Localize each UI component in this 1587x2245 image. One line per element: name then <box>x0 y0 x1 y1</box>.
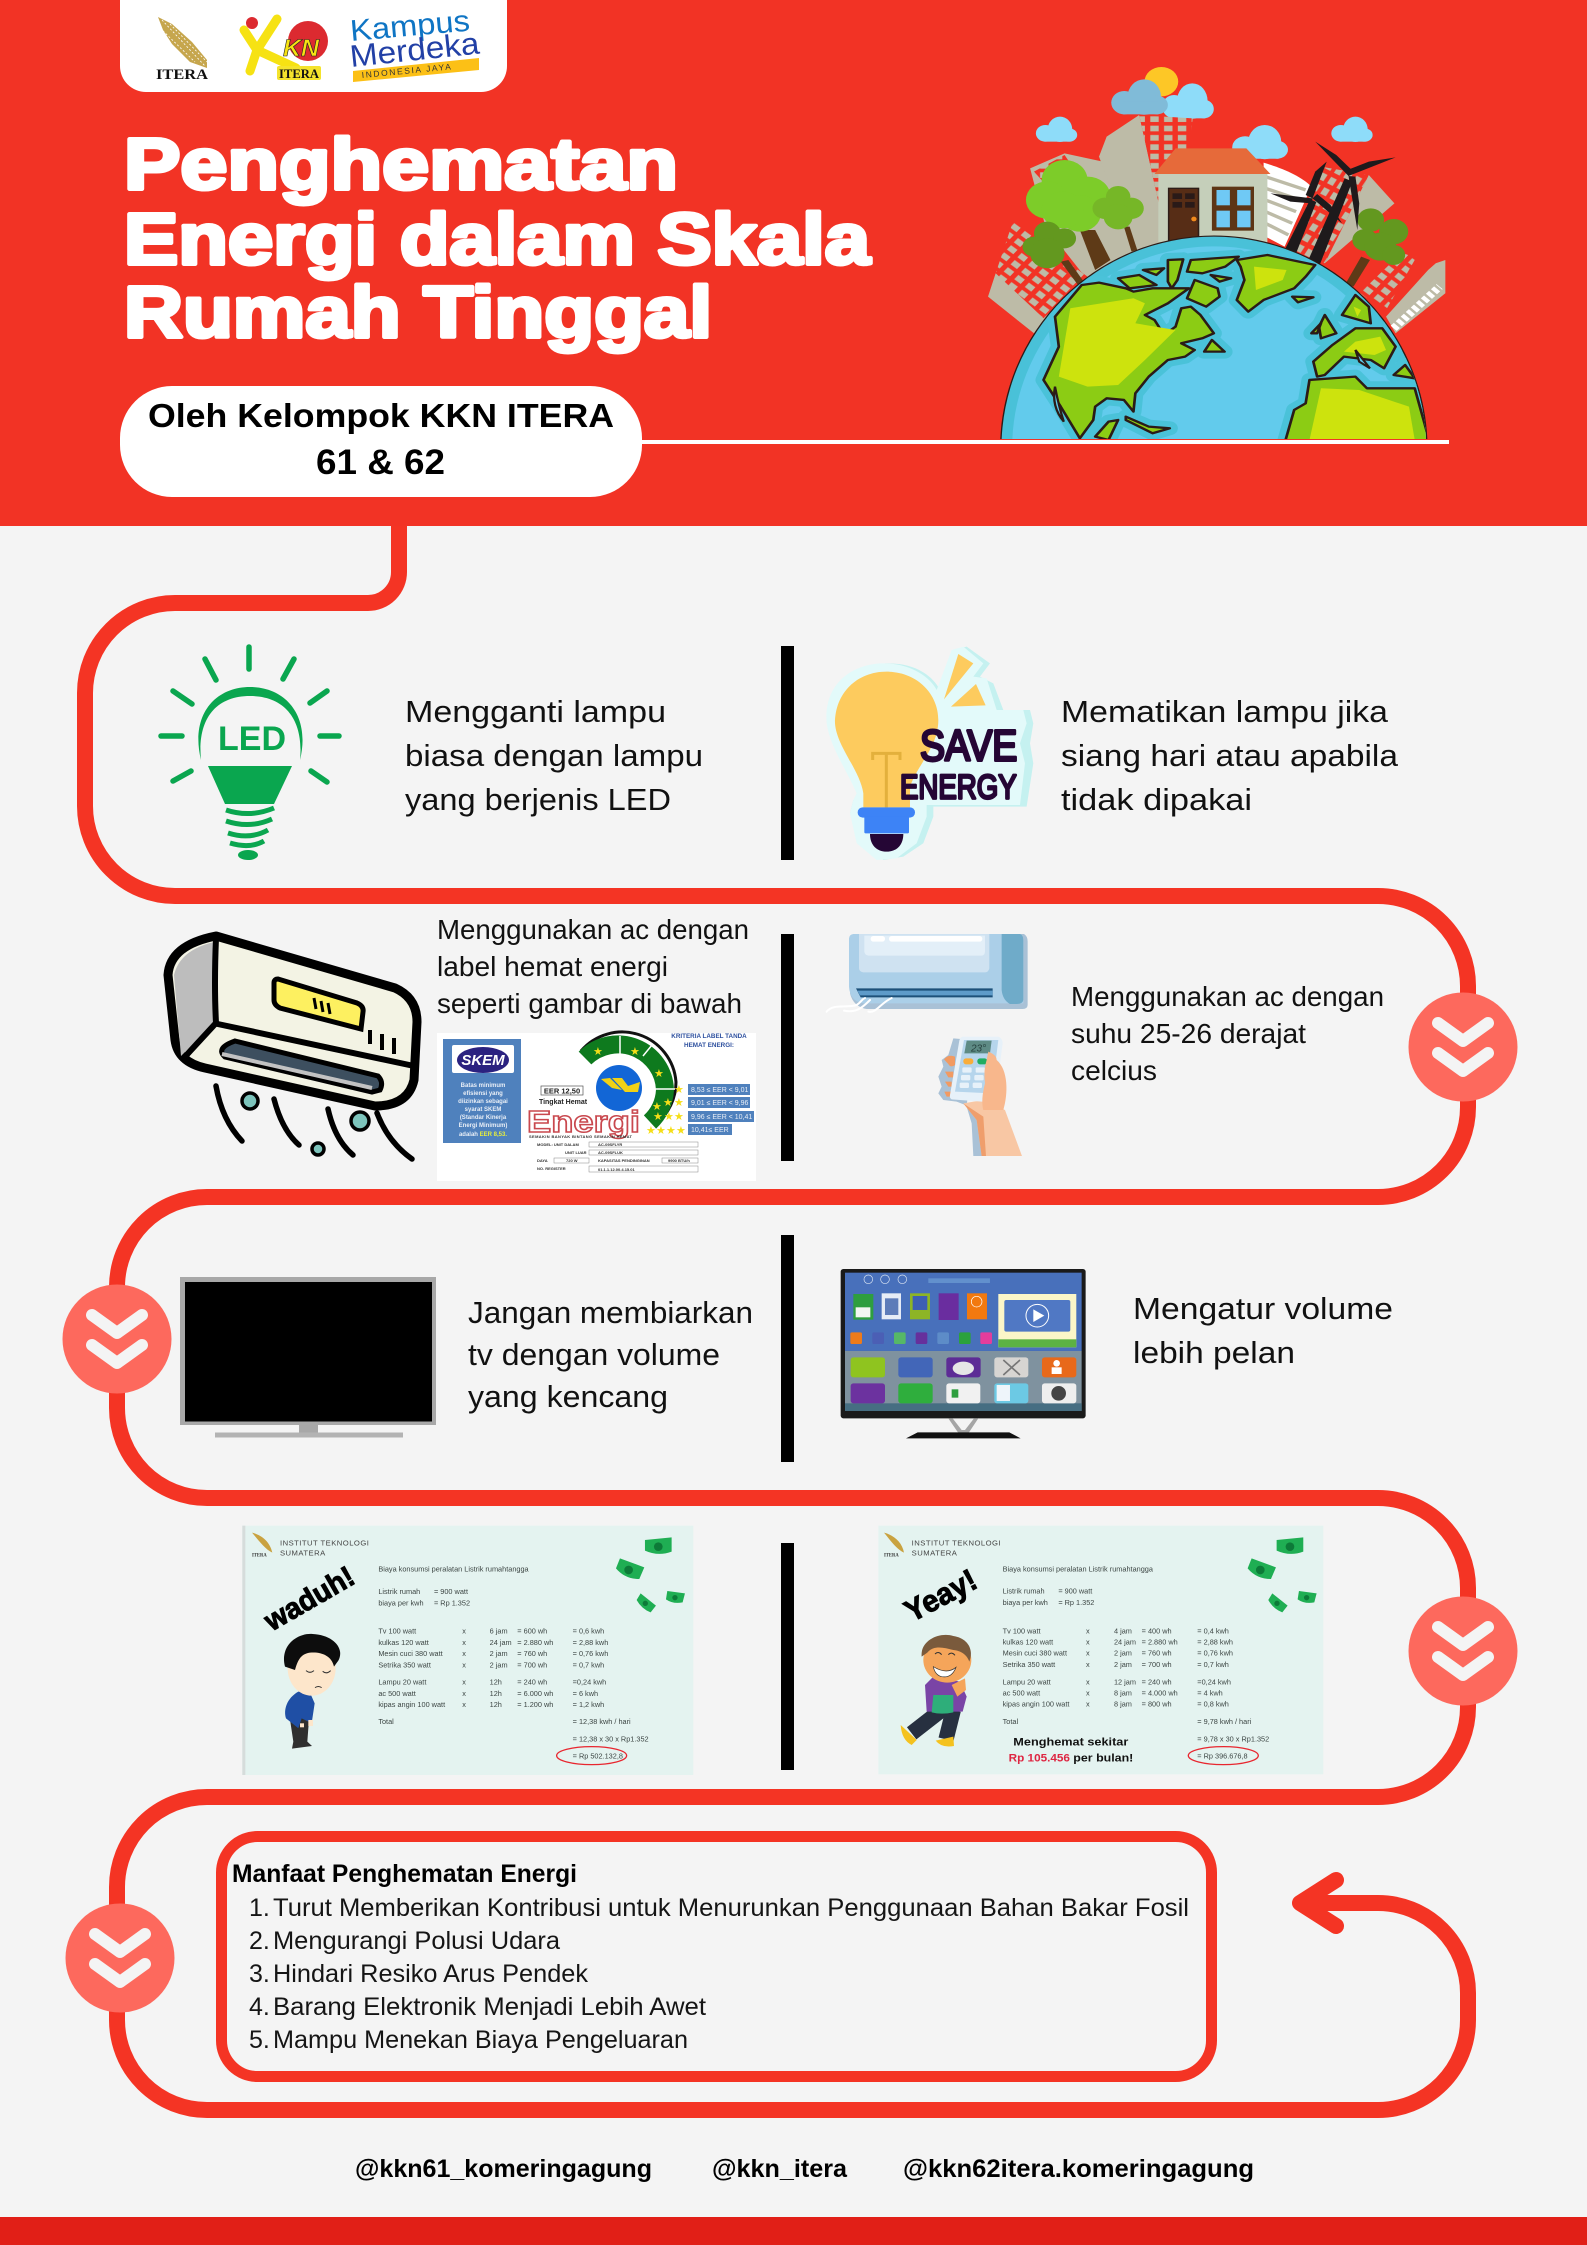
SKEM panel: adalah EER 8,53. <box>459 1132 507 1138</box>
register details: AC-09SFLUK <box>598 1150 623 1155</box>
EER value: EER 12,50 <box>544 1086 580 1096</box>
icon: chevron button 4 <box>66 1904 174 2012</box>
cost table <box>1003 1564 1269 1761</box>
SKEM panel: (Standar Kinerja <box>460 1115 507 1121</box>
cost table: biaya per kwh <box>378 1598 424 1607</box>
savings callout: Menghemat sekitar <box>1013 1736 1129 1748</box>
cost table: = 1.200 wh <box>517 1700 553 1709</box>
author pill <box>120 386 642 497</box>
winding path with arrow <box>85 526 1468 2110</box>
cost table: 24 jam <box>1114 1638 1136 1647</box>
star rating dial: ★ <box>663 1097 673 1109</box>
cost table: x <box>1086 1689 1090 1698</box>
cost table: kipas angin 100 watt <box>378 1700 445 1709</box>
benefits items: 3. <box>249 1960 270 1988</box>
cost table: = 0,8 kwh <box>1197 1700 1229 1709</box>
author pill: 61 & 62 <box>316 443 445 482</box>
icon: LED bulb: LED <box>218 720 286 758</box>
ITERA header: ITERA <box>884 1554 899 1559</box>
icon: save energy sticker <box>826 647 1033 860</box>
title: Energi dalam Skala <box>124 200 871 280</box>
cost table: =0,24 kwh <box>1197 1677 1231 1686</box>
star rating dial <box>581 1032 686 1137</box>
divider row 4 <box>781 1543 794 1770</box>
text: lower volume: lebih pelan <box>1133 1335 1295 1370</box>
EER criteria: 8,53 ≤ EER < 9,01 <box>691 1087 748 1094</box>
SKEM panel: Energi Minimum) <box>459 1123 507 1129</box>
cost table: = Rp 502.132,8 <box>573 1752 623 1761</box>
cost table: = 0,76 kwh <box>573 1649 608 1658</box>
divider row 1 <box>781 646 794 860</box>
cost table: = 0,7 kwh <box>573 1660 604 1669</box>
cost table: = 700 wh <box>1142 1660 1172 1669</box>
ITERA header: SUMATERA <box>280 1548 326 1557</box>
cost table: = 0,76 kwh <box>1197 1649 1233 1658</box>
ITERA header: SUMATERA <box>912 1548 958 1557</box>
icon: ITERA logo <box>156 17 208 83</box>
cost table: = 12,38 kwh / hari <box>573 1717 631 1726</box>
star rating dial: ★ <box>593 1046 603 1058</box>
title: Penghematan <box>124 125 678 205</box>
register details: MODEL: UNIT DALAM <box>537 1142 579 1147</box>
title: Rumah Tinggal <box>124 273 712 353</box>
register details: 9900 BTU/h <box>668 1158 690 1163</box>
cost table: = 0,7 kwh <box>1197 1660 1229 1669</box>
EER criteria <box>671 1033 754 1135</box>
SKEM panel: diizinkan sebagai <box>458 1099 508 1105</box>
ITERA header: INSTITUT TEKNOLOGI <box>280 1538 369 1547</box>
register details: 720 W <box>566 1158 578 1163</box>
cost table: x <box>462 1660 466 1669</box>
icon: KKN logo: ITERA <box>279 66 320 81</box>
ITERA header <box>252 1533 369 1559</box>
benefits heading: Manfaat Penghematan Energi <box>232 1860 577 1888</box>
EER criteria: HEMAT ENERGI: <box>684 1042 734 1049</box>
cost table: = 4.000 wh <box>1142 1689 1178 1698</box>
icon: chevron button 3 <box>1408 1596 1518 1706</box>
register details: NO. REGISTER <box>537 1166 566 1171</box>
savings callout <box>1009 1736 1133 1765</box>
cost table: Tv 100 watt <box>378 1627 416 1636</box>
cost table: x <box>1086 1649 1090 1658</box>
cost table: x <box>1086 1700 1090 1709</box>
icon: ITERA logo: ITERA <box>156 67 208 83</box>
cost table: Setrika 350 watt <box>378 1660 431 1669</box>
icon: chevron button 1 <box>1408 992 1518 1102</box>
cost table: kulkas 120 watt <box>378 1638 429 1647</box>
text: energy saving label AC: label hemat energi <box>437 951 668 982</box>
cost table: Listrik rumah <box>1003 1587 1045 1596</box>
cost table: x <box>462 1649 466 1658</box>
cost table: ac 500 watt <box>1003 1689 1040 1698</box>
cost table: = 900 watt <box>434 1587 468 1596</box>
text: energy saving label AC: Menggunakan ac dengan <box>437 914 749 945</box>
cost table: kulkas 120 watt <box>1003 1638 1053 1647</box>
cost table: 2 jam <box>490 1660 508 1669</box>
social handles: @kkn61_komeringagung <box>355 2155 652 2183</box>
cost table: 4 jam <box>1114 1626 1132 1635</box>
ITERA header: INSTITUT TEKNOLOGI <box>912 1538 1001 1547</box>
panel: cost after saving <box>878 1526 1323 1774</box>
character: happy man <box>901 1635 971 1747</box>
cost table: kipas angin 100 watt <box>1003 1700 1069 1709</box>
cost table: x <box>462 1627 466 1636</box>
icon: wall AC with remote <box>827 934 1028 1156</box>
benefits items: 5. <box>249 2026 270 2054</box>
savings callout: Rp 105.456 <box>1009 1753 1070 1765</box>
cost table: Mesin cuci 380 watt <box>378 1649 443 1658</box>
text: replace bulbs: yang berjenis LED <box>405 782 671 817</box>
text: AC temperature: suhu 25-26 derajat <box>1071 1018 1306 1049</box>
benefits items: Mengurangi Polusi Udara <box>273 1927 560 1955</box>
title <box>124 125 871 353</box>
cost table: 12h <box>490 1689 502 1698</box>
cost table: = 800 wh <box>1142 1700 1172 1709</box>
star rating dial: ★ <box>630 1046 640 1058</box>
register details: SEMAKIN BANYAK BINTANG SEMAKIN HEMAT <box>529 1134 633 1139</box>
benefits items: 2. <box>249 1927 270 1955</box>
cost table: ac 500 watt <box>378 1689 416 1698</box>
SKEM panel: efisiensi yang <box>463 1091 503 1097</box>
star rating dial: ★ <box>652 1101 662 1113</box>
cost table: Total <box>378 1717 394 1726</box>
text: replace bulbs <box>405 694 703 817</box>
icon: black outline air conditioner <box>168 936 417 1159</box>
cost table: Setrika 350 watt <box>1003 1660 1055 1669</box>
benefits items: 1. <box>249 1894 270 1922</box>
star rating dial: ★ <box>653 1111 663 1123</box>
cost table: 6 jam <box>490 1627 508 1636</box>
logo panel <box>120 0 507 92</box>
land masses <box>1044 255 1430 443</box>
cost table: = 240 wh <box>517 1678 547 1687</box>
cost table: = 600 wh <box>517 1627 547 1636</box>
image: energy label <box>437 1032 756 1181</box>
text: turn off lamps: siang hari atau apabila <box>1061 738 1399 773</box>
cost table: 24 jam <box>490 1638 512 1647</box>
cost table: = 0,4 kwh <box>1197 1626 1229 1635</box>
cost table: = 2,88 kwh <box>1197 1638 1233 1647</box>
social handles: @kkn_itera <box>712 2155 848 2183</box>
footer band <box>0 2217 1587 2245</box>
register details: UNIT LUAR <box>565 1150 587 1155</box>
SKEM panel: syarat SKEM <box>465 1107 501 1113</box>
ITERA header <box>884 1533 1001 1559</box>
text: turn off lamps <box>1061 694 1399 817</box>
cost table: x <box>1086 1638 1090 1647</box>
ITERA header: ITERA <box>252 1554 267 1559</box>
cost table: Biaya konsumsi peralatan Listrik rumahtangga <box>378 1565 530 1574</box>
text: turn off lamps: tidak dipakai <box>1061 782 1252 817</box>
text: lower volume <box>1133 1291 1393 1370</box>
star rating dial: ★ <box>674 1097 684 1109</box>
register details: 01.1.1.12.00.4.15.01 <box>598 1167 635 1172</box>
cost table: = 2,88 kwh <box>573 1638 608 1647</box>
text: TV volume warning: tv dengan volume <box>468 1337 720 1372</box>
text: AC temperature: Menggunakan ac dengan <box>1071 981 1384 1012</box>
text: TV volume warning: Jangan membiarkan <box>468 1295 753 1330</box>
register details <box>529 1134 698 1172</box>
cost table: Biaya konsumsi peralatan Listrik rumahtangga <box>1003 1564 1154 1573</box>
cost table: = 6 kwh <box>573 1689 598 1698</box>
star rating dial: ★ <box>666 1125 676 1137</box>
EER value <box>539 1086 588 1106</box>
cost table: Tv 100 watt <box>1003 1626 1041 1635</box>
icon: save energy sticker: SAVE <box>920 723 1017 771</box>
star rating dial: ★ <box>656 1125 666 1137</box>
text: energy saving label AC <box>437 914 749 1019</box>
header band <box>0 0 1587 526</box>
benefits items: Barang Elektronik Menjadi Lebih Awet <box>273 1993 706 2021</box>
Energi wordmark: Energi <box>527 1104 640 1139</box>
cost table: 2 jam <box>1114 1649 1132 1658</box>
EER criteria: 9,01 ≤ EER < 9,96 <box>691 1100 748 1107</box>
cost table: Lampu 20 watt <box>1003 1677 1051 1686</box>
icon: chevron button 2 <box>62 1284 172 1394</box>
cost table: Lampu 20 watt <box>378 1678 426 1687</box>
cost table: 12 jam <box>1114 1677 1136 1686</box>
cost table: = 700 wh <box>517 1660 547 1669</box>
benefits items: Mampu Menekan Biaya Pengeluaran <box>273 2026 688 2054</box>
hand with remote: 23° <box>970 1043 986 1054</box>
EER criteria: 9,96 ≤ EER < 10,41 <box>691 1114 752 1121</box>
cost table: = Rp 1.352 <box>1058 1598 1094 1607</box>
benefits items <box>249 1894 1189 2054</box>
text: replace bulbs: Mengganti lampu <box>405 694 666 729</box>
icon: Kampus Merdeka logo: Kampus <box>349 5 471 48</box>
EER criteria: 10,41≤ EER <box>691 1127 729 1134</box>
cost table: 2 jam <box>490 1649 508 1658</box>
benefits items: Hindari Resiko Arus Pendek <box>273 1960 588 1988</box>
cost table <box>378 1565 649 1761</box>
cost table: = 1,2 kwh <box>573 1700 604 1709</box>
cost table: = 240 wh <box>1142 1677 1172 1686</box>
SKEM panel <box>443 1039 521 1143</box>
cost table: = 2.880 wh <box>517 1638 553 1647</box>
register details: KAPASITAS PENDINGINAN <box>598 1158 650 1163</box>
icon: LED bulb <box>161 647 339 860</box>
cost table: = Rp 396.676,8 <box>1197 1752 1248 1761</box>
cost table: Mesin cuci 380 watt <box>1003 1649 1067 1658</box>
cost table: = 0,6 kwh <box>573 1627 604 1636</box>
panel: benefits list <box>222 1836 1212 2076</box>
cost table: 12h <box>490 1678 502 1687</box>
author pill: Oleh Kelompok KKN ITERA <box>148 397 614 434</box>
text: TV volume warning: yang kencang <box>468 1379 668 1414</box>
social handles <box>355 2155 1254 2183</box>
divider row 3 <box>781 1235 794 1462</box>
icon: blank television <box>180 1277 436 1438</box>
star rating dial: ★ <box>676 1125 686 1137</box>
cost table: = 9,78 kwh / hari <box>1197 1717 1252 1726</box>
EER value: Tingkat Hemat <box>539 1099 588 1106</box>
benefits items: 4. <box>249 1993 270 2021</box>
cost table: = 6.000 wh <box>517 1689 553 1698</box>
text: AC temperature <box>1071 981 1384 1086</box>
wall AC unit <box>827 934 1028 1012</box>
cost table: = 760 wh <box>517 1649 547 1658</box>
cost table: = 760 wh <box>1142 1649 1172 1658</box>
text: energy saving label AC: seperti gambar di bawah <box>437 988 742 1019</box>
illustration: earth with city, house and wind turbines <box>988 67 1446 439</box>
text: lower volume: Mengatur volume <box>1133 1291 1393 1326</box>
text: AC temperature: celcius <box>1071 1055 1157 1086</box>
text: replace bulbs: biasa dengan lampu <box>405 738 703 773</box>
cost table: = 4 kwh <box>1197 1689 1223 1698</box>
cost table: =0,24 kwh <box>573 1678 606 1687</box>
register details: AC-09SFLYR <box>598 1142 622 1147</box>
cost table: = 400 wh <box>1142 1626 1172 1635</box>
icon: Kampus Merdeka logo <box>348 5 482 82</box>
cost table: 8 jam <box>1114 1689 1132 1698</box>
icon: Kampus Merdeka logo: INDONESIA JAYA <box>361 61 453 80</box>
cost table: = 12,38 x 30 x Rp1.352 <box>573 1734 649 1743</box>
cost table: biaya per kwh <box>1003 1598 1048 1607</box>
star rating dial: ★ <box>654 1068 664 1080</box>
icon: Kampus Merdeka logo: Merdeka <box>348 25 482 74</box>
cost table: 12h <box>490 1700 502 1709</box>
cost table: x <box>1086 1677 1090 1686</box>
star rating dial: ★ <box>674 1084 684 1096</box>
cost table: = 2.880 wh <box>1142 1638 1178 1647</box>
SKEM panel: SKEM <box>461 1052 505 1069</box>
cost table: = Rp 1.352 <box>434 1598 470 1607</box>
icon: KKN logo <box>244 17 328 81</box>
text: TV volume warning <box>468 1295 753 1414</box>
hand with remote <box>938 1037 1022 1156</box>
falling money <box>1248 1537 1317 1612</box>
benefits items: Turut Memberikan Kontribusi untuk Menurunkan Penggunaan Bahan Bakar Fosil <box>273 1894 1189 1922</box>
cost table: Total <box>1003 1717 1019 1726</box>
star rating dial: ★ <box>646 1125 656 1137</box>
text: turn off lamps: Mematikan lampu jika <box>1061 694 1389 729</box>
cost table: 8 jam <box>1114 1700 1132 1709</box>
panel: cost before saving <box>242 1526 693 1775</box>
star rating dial: ★ <box>674 1111 684 1123</box>
cost table: x <box>462 1638 466 1647</box>
cost table: Listrik rumah <box>378 1587 420 1596</box>
cost table: x <box>1086 1660 1090 1669</box>
cost table: x <box>462 1700 466 1709</box>
star rating dial: ★ <box>664 1111 674 1123</box>
yeay word: Yeay! <box>899 1563 983 1629</box>
cost table: x <box>462 1678 466 1687</box>
cost table: x <box>1086 1626 1090 1635</box>
savings callout: per bulan! <box>1073 1753 1133 1765</box>
cost table: = 900 watt <box>1058 1587 1092 1596</box>
divider row 2 <box>781 934 794 1161</box>
waduh word: waduh! <box>258 1560 360 1638</box>
cost table: x <box>462 1689 466 1698</box>
SKEM panel: Batas minimum <box>461 1083 505 1089</box>
falling money <box>616 1537 685 1612</box>
register details: DAYA <box>537 1158 548 1163</box>
cost table: = 9,78 x 30 x Rp1.352 <box>1197 1734 1269 1743</box>
icon: save energy sticker: ENERGY <box>900 768 1017 806</box>
cost table: 2 jam <box>1114 1660 1132 1669</box>
icon: KKN logo: KN <box>283 35 320 62</box>
icon: smart TV <box>841 1269 1086 1438</box>
social handles: @kkn62itera.komeringagung <box>903 2155 1254 2183</box>
character: tired man <box>284 1634 340 1749</box>
EER criteria: KRITERIA LABEL TANDA <box>671 1033 747 1040</box>
